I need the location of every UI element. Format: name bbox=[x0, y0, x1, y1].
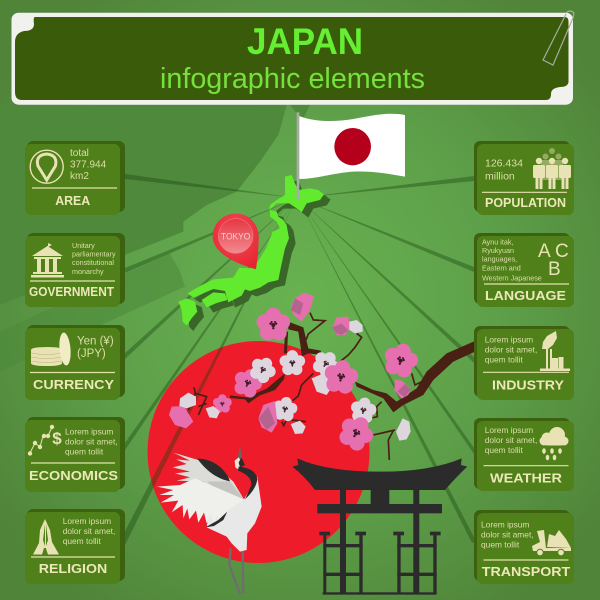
label: TRANSPORT bbox=[482, 564, 570, 579]
government type: Unitary bbox=[72, 241, 95, 250]
legs bbox=[229, 548, 243, 594]
cherry blossom branch bbox=[169, 293, 475, 460]
population value: 126.434 bbox=[485, 158, 523, 170]
icon: group of people bbox=[533, 148, 571, 189]
panel: weather bbox=[474, 418, 574, 491]
torii gate bbox=[292, 458, 467, 595]
language list: Western Japanese bbox=[482, 273, 542, 282]
panel: population bbox=[474, 141, 574, 215]
icon: government building bbox=[31, 243, 64, 278]
language list: languages, bbox=[482, 255, 517, 264]
weather text: Lorem ipsum bbox=[485, 425, 533, 435]
neck and head bbox=[238, 445, 242, 459]
icon: rain cloud bbox=[540, 427, 568, 460]
population value: million bbox=[485, 170, 515, 182]
currency name: (JPY) bbox=[77, 348, 106, 360]
asian continent silhouette bbox=[0, 105, 310, 372]
panel: currency bbox=[25, 325, 125, 400]
icon: letters A C B: B bbox=[548, 259, 561, 280]
currency name: Yen (¥) bbox=[77, 336, 114, 348]
flower buds bbox=[169, 293, 411, 441]
red sun bbox=[148, 341, 370, 563]
transport text: Lorem ipsum bbox=[481, 520, 529, 530]
red-crowned crane bbox=[157, 445, 262, 594]
label: AREA bbox=[55, 193, 91, 208]
Tokyo location pin bbox=[213, 214, 259, 269]
icon: letters A C B bbox=[538, 241, 569, 280]
paper clip bbox=[543, 11, 574, 65]
icon: dump truck bbox=[532, 530, 571, 556]
panel: transport bbox=[474, 510, 574, 584]
industry text: quem tollit bbox=[485, 354, 524, 364]
icon: letters A C B: C bbox=[555, 241, 569, 262]
panel: area bbox=[25, 141, 125, 215]
government type: constitutional bbox=[72, 258, 114, 267]
label: INDUSTRY bbox=[492, 377, 564, 392]
industry text: dolor sit amet, bbox=[485, 344, 537, 354]
body bbox=[207, 477, 262, 552]
religion text: Lorem ipsum bbox=[63, 516, 111, 526]
religion text: quem tollit bbox=[63, 536, 102, 546]
label: ECONOMICS bbox=[29, 468, 118, 483]
panel: government bbox=[25, 233, 125, 307]
language list: Ryukyuan bbox=[482, 246, 514, 255]
area value: km2 bbox=[70, 171, 89, 182]
pink and white flowers bbox=[169, 293, 421, 455]
panel: religion bbox=[25, 509, 125, 584]
economics text: quem tollit bbox=[65, 446, 104, 456]
subtitle: infographic elements bbox=[160, 63, 425, 95]
language list: Aynu itak, bbox=[482, 237, 513, 246]
header banner bbox=[12, 11, 574, 105]
area value: total bbox=[70, 148, 89, 159]
government type: monarchy bbox=[72, 267, 104, 276]
label: WEATHER bbox=[490, 471, 563, 486]
rays from map to panels bbox=[120, 174, 476, 545]
weather text: quem tollit bbox=[485, 445, 524, 455]
lower wing feathers bbox=[157, 478, 244, 523]
map of Japan bbox=[178, 175, 331, 331]
icon: letters A C B: A bbox=[538, 241, 551, 262]
label: POPULATION bbox=[485, 195, 566, 210]
icon: factory bbox=[540, 331, 570, 371]
label: RELIGION bbox=[39, 561, 107, 576]
upper wing bbox=[173, 453, 244, 502]
language list: Eastern and bbox=[482, 263, 521, 272]
icon: map pin in ring bbox=[30, 150, 63, 183]
industry text: Lorem ipsum bbox=[485, 334, 533, 344]
economics text: Lorem ipsum bbox=[65, 426, 113, 436]
panel: industry bbox=[474, 326, 574, 400]
panel: economics bbox=[25, 417, 125, 492]
economics text: dolor sit amet, bbox=[65, 436, 118, 446]
panel: language bbox=[474, 233, 574, 307]
transport text: dolor sit amet, bbox=[481, 530, 534, 540]
area value: 377.944 bbox=[70, 160, 107, 170]
transport text: quem tollit bbox=[481, 540, 520, 550]
weather text: dolor sit amet, bbox=[485, 435, 537, 445]
label: LANGUAGE bbox=[485, 288, 566, 303]
government type: parliamentary bbox=[72, 250, 116, 258]
title: JAPAN bbox=[247, 21, 363, 62]
flag of Japan on pole bbox=[297, 112, 405, 199]
branch wood bbox=[188, 313, 475, 460]
label: CURRENCY bbox=[33, 377, 114, 392]
label: GOVERNMENT bbox=[29, 284, 114, 299]
icon: praying hands bbox=[33, 519, 59, 554]
icon: chart and dollar: $ bbox=[52, 429, 62, 448]
religion text: dolor sit amet, bbox=[63, 526, 115, 536]
Tokyo location pin: TOKYO bbox=[221, 231, 250, 241]
icon: coins bbox=[31, 332, 72, 366]
